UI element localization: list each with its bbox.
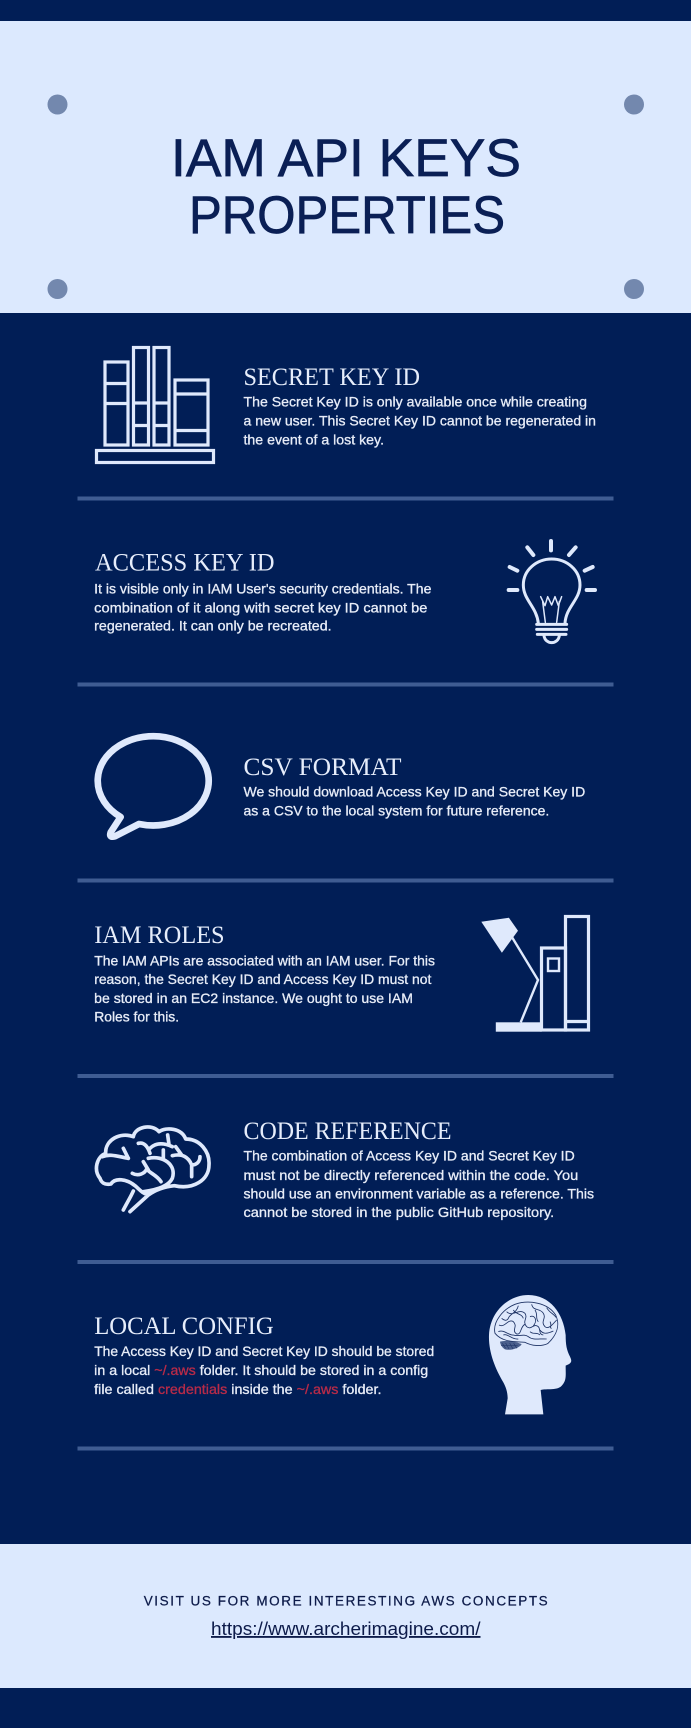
panel: csv format — [98, 736, 585, 837]
panel: iam roles — [94, 916, 588, 1032]
body text: should use an environment variable as a reference. This — [244, 1186, 594, 1202]
body text: a new user. This Secret Key ID cannot be regenerated in — [244, 413, 596, 429]
body text: be stored in an EC2 instance. We ought to use IAM — [94, 990, 413, 1006]
body text — [94, 1343, 434, 1397]
panel: secret key id — [96, 348, 596, 462]
body text — [244, 1148, 594, 1220]
body text — [94, 952, 435, 1025]
icon: books on shelf — [96, 348, 214, 462]
body text: in a local ~/.aws folder. It should be stored in a config — [94, 1362, 428, 1378]
body text: must not be directly referenced within the code. You — [244, 1167, 578, 1183]
panel: code reference — [96, 1118, 594, 1220]
body text: cannot be stored in the public GitHub repository. — [244, 1204, 554, 1220]
body text: The IAM APIs are associated with an IAM user. For this — [94, 952, 435, 968]
body text: reason, the Secret Key ID and Access Key ID must not — [94, 971, 432, 987]
body text: We should download Access Key ID and Secret Key ID — [244, 783, 585, 799]
heading: CSV FORMAT — [244, 754, 402, 781]
heading: CODE REFERENCE — [244, 1118, 452, 1145]
decorative corner dots — [48, 94, 644, 299]
panel: access key id — [94, 541, 595, 643]
body text: Roles for this. — [94, 1009, 179, 1025]
body text: The combination of Access Key ID and Secret Key ID — [244, 1148, 575, 1164]
heading: LOCAL CONFIG — [94, 1313, 274, 1340]
heading: SECRET KEY ID — [244, 364, 420, 391]
panel: local config — [94, 1295, 571, 1414]
title — [171, 129, 521, 245]
body text — [244, 783, 585, 818]
heading: IAM ROLES — [94, 922, 225, 949]
body text: as a CSV to the local system for future reference. — [244, 802, 549, 818]
footer url: https://www.archerimagine.com/ — [211, 1618, 481, 1639]
body text: file called credentials inside the ~/.aws folder. — [94, 1381, 381, 1397]
body text: regenerated. It can only be recreated. — [94, 618, 332, 634]
panel: title header — [0, 21, 691, 313]
body text: combination of it along with secret key ID cannot be — [94, 599, 428, 615]
heading: ACCESS KEY ID — [95, 550, 274, 577]
body text: The Secret Key ID is only available once while creating — [244, 394, 587, 410]
icon: head with brain — [489, 1295, 571, 1414]
body text — [94, 580, 432, 634]
body text: The Access Key ID and Secret Key ID should be stored — [94, 1343, 434, 1359]
body text: the event of a lost key. — [244, 432, 384, 448]
title: IAM API KEYS — [171, 129, 521, 188]
footer call to action: VISIT US FOR MORE INTERESTING AWS CONCEPTS — [144, 1593, 548, 1608]
body text — [244, 394, 596, 448]
panel: footer — [0, 1544, 691, 1688]
icon: speech bubble — [98, 736, 209, 837]
icon: brain outline — [96, 1127, 209, 1212]
title: PROPERTIES — [189, 186, 505, 245]
icon: light bulb — [509, 541, 595, 643]
icon: desk lamp and books — [481, 916, 588, 1032]
body text: It is visible only in IAM User's security credentials. The — [94, 580, 432, 596]
